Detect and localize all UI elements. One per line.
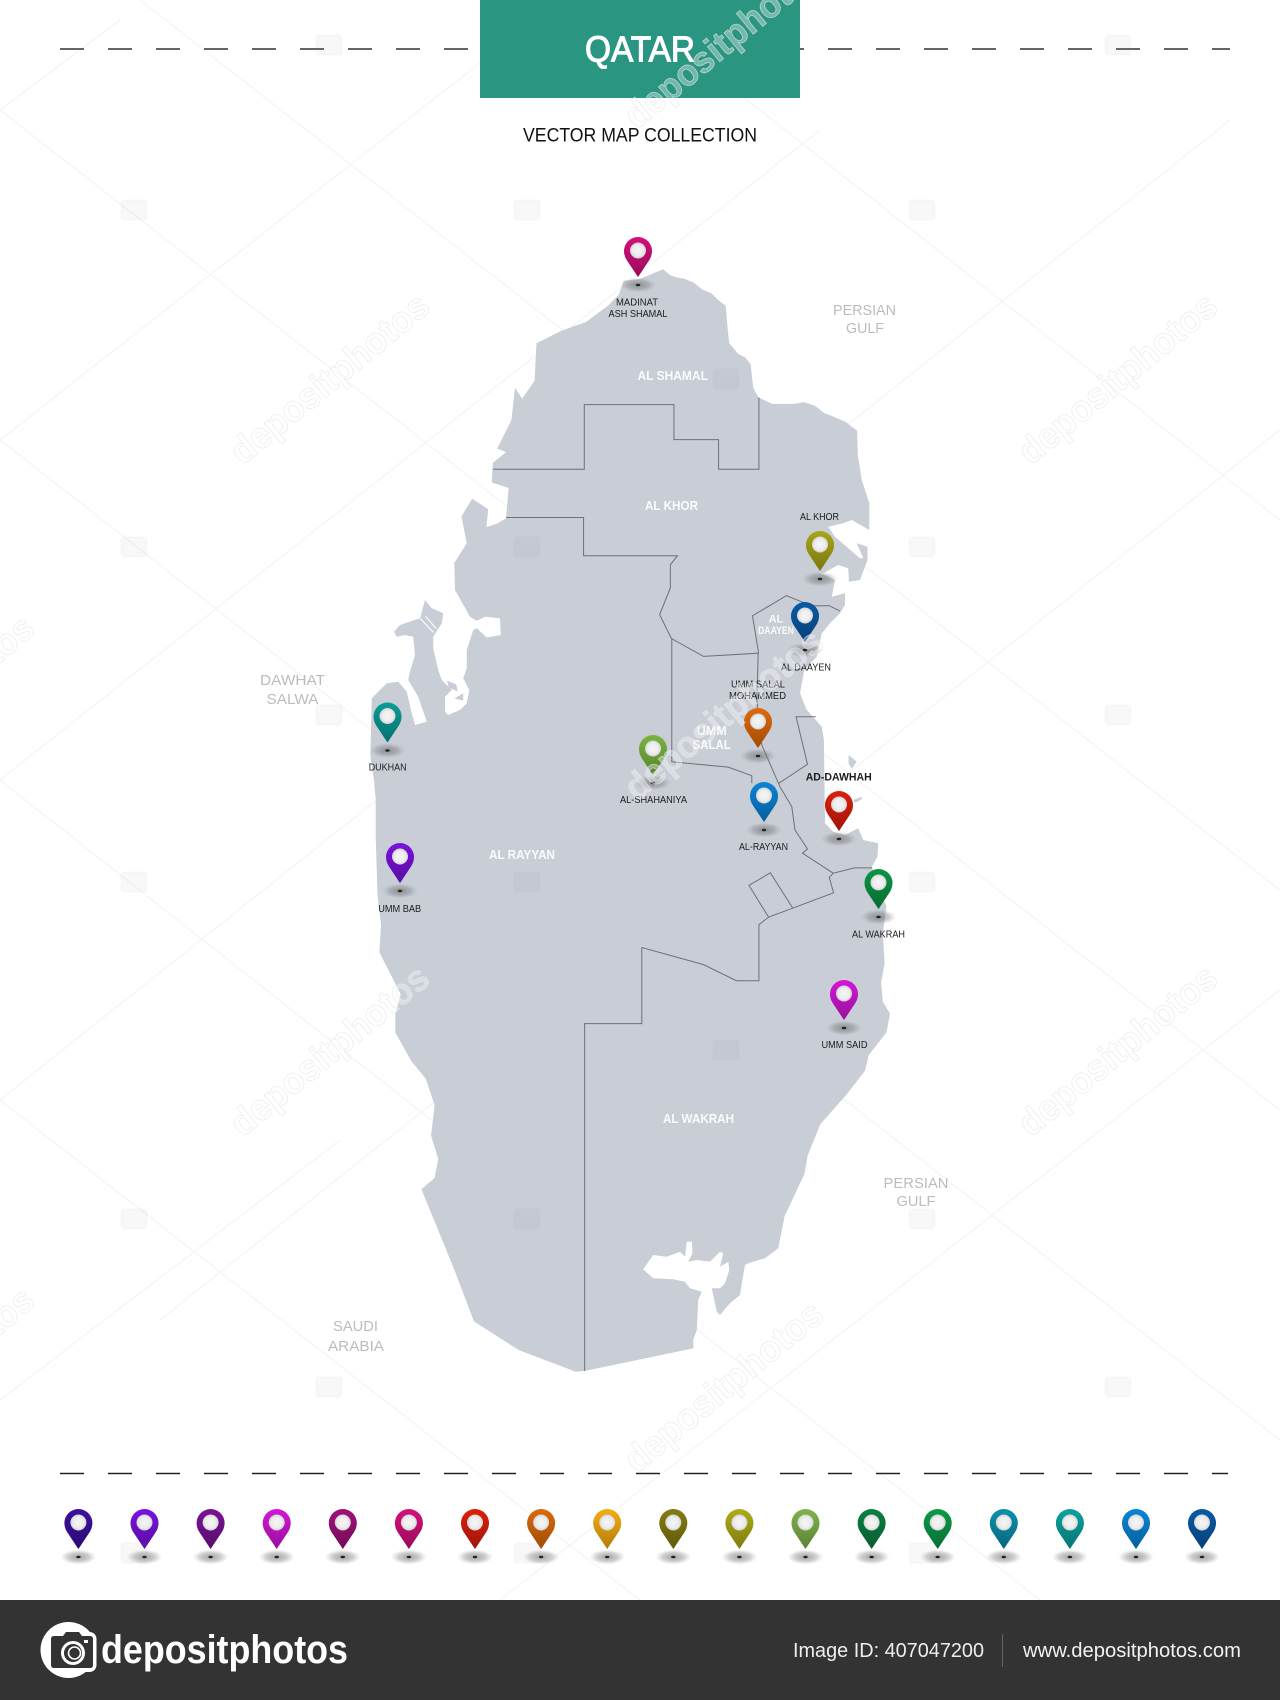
top dashed rule	[60, 48, 1230, 50]
pin colour legend row	[60, 1509, 1220, 1564]
city labels	[369, 298, 905, 1051]
watermark text: depositphotos	[222, 957, 437, 1144]
inlet flecks and small land patches	[420, 616, 463, 700]
region labels	[489, 368, 794, 1126]
region labels: AL WAKRAH	[663, 1111, 734, 1126]
city labels: MOHAMMED	[729, 691, 786, 702]
city pin: Al Daayen	[787, 602, 823, 658]
website: www.depositphotos.com	[1022, 1640, 1241, 1662]
city labels: AL WAKRAH	[852, 930, 905, 941]
offshore islets near Ad-Dawhah	[849, 755, 862, 803]
city pin: Madinat Ash Shamal	[620, 237, 656, 292]
municipality borders	[493, 397, 872, 1371]
land outline	[370, 269, 890, 1372]
sea and neighbour labels: PERSIAN	[833, 302, 896, 319]
sea and neighbour labels: GULF	[846, 320, 884, 337]
region labels: AL KHOR	[645, 498, 699, 513]
sea and neighbour labels: GULF	[896, 1193, 936, 1210]
city pin: Al-Rayyan	[746, 782, 782, 838]
city pin: Dukhan	[370, 702, 406, 758]
region labels: DAAYEN	[758, 625, 794, 637]
city pin: Al Khor	[802, 531, 838, 586]
city labels: AL DAAYEN	[781, 663, 831, 674]
city pin: Umm Said	[826, 980, 862, 1036]
region labels: AL RAYYAN	[489, 847, 555, 862]
city pin: Al-Shahaniya	[635, 735, 671, 790]
watermark text: depositphotos	[616, 621, 831, 808]
title banner	[480, 0, 800, 98]
city labels: DUKHAN	[369, 763, 407, 774]
watermark text: depositphotos	[1010, 285, 1225, 472]
watermark text: depositphotos	[616, 1293, 831, 1480]
city labels: UMM SALAL	[731, 680, 785, 691]
city labels: AL-SHAHANIYA	[620, 795, 687, 806]
bottom dashed rule	[60, 1472, 1228, 1474]
sea and neighbour labels: SALWA	[266, 691, 318, 708]
map of Qatar	[370, 269, 890, 1372]
region labels: SALAL	[693, 737, 731, 752]
subtitle: VECTOR MAP COLLECTION	[523, 124, 757, 146]
city pin: Umm Bab	[382, 843, 418, 898]
city pin: Ad-Dawhah	[821, 791, 857, 846]
sea and neighbour labels: ARABIA	[328, 1338, 384, 1355]
logo wordmark: depositphotos	[101, 1628, 348, 1672]
icon: depositphotos camera logo	[40, 1622, 96, 1678]
sea and neighbour labels: DAWHAT	[260, 672, 325, 689]
sea and neighbour labels	[260, 302, 948, 1355]
city pin: Al Wakrah	[860, 869, 896, 924]
watermark text: depositphotos	[222, 285, 437, 472]
city pin: Umm Salal Mohammed	[740, 708, 776, 764]
city labels: UMM BAB	[378, 904, 422, 915]
city labels: AD-DAWHAH	[806, 772, 872, 784]
region labels: AL	[769, 614, 784, 626]
city labels: AL KHOR	[800, 512, 839, 523]
title banner: QATAR	[585, 28, 695, 70]
watermark text: depositphotos	[1010, 957, 1225, 1144]
image id: Image ID: 407047200	[793, 1640, 984, 1662]
region labels: UMM	[697, 723, 727, 738]
city labels: UMM SAID	[822, 1040, 868, 1051]
city labels: AL-RAYYAN	[739, 842, 788, 853]
watermark camera marks	[121, 35, 1131, 1563]
footer bar	[0, 1600, 1280, 1700]
sea and neighbour labels: PERSIAN	[884, 1175, 948, 1192]
city labels: ASH SHAMAL	[608, 309, 668, 320]
region labels: AL SHAMAL	[637, 368, 708, 383]
sea and neighbour labels: SAUDI	[333, 1318, 378, 1335]
city labels: MADINAT	[616, 298, 658, 309]
